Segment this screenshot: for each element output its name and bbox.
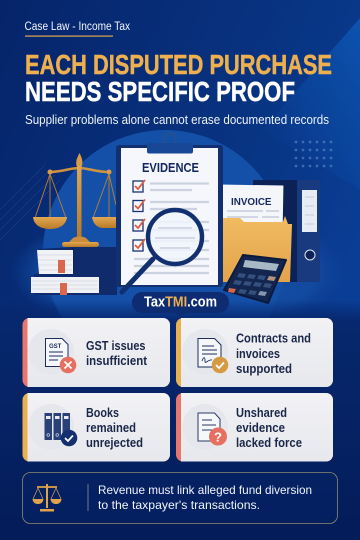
checklist [133, 180, 209, 273]
icon: document question: ? [214, 430, 222, 444]
illustration: evidence clipboard [116, 133, 223, 292]
card: unshared evidence: Unshared [236, 406, 287, 420]
card: GST issues [22, 318, 170, 387]
card: books unrejected: Books [86, 406, 119, 420]
decorative dot grid [295, 141, 332, 167]
icon: signed contract [198, 338, 228, 373]
callout: revenue must link [22, 472, 338, 524]
illustration: evidence clipboard: EVIDENCE [142, 160, 199, 175]
subtitle: Supplier problems alone cannot erase documented records [25, 112, 329, 127]
card: books unrejected: unrejected [86, 436, 143, 450]
illustration: scales of justice [33, 153, 116, 247]
card: unshared evidence: lacked force [236, 436, 302, 450]
card: contracts and invoices: invoices [236, 347, 280, 361]
card: GST issues: insufficient [86, 354, 148, 368]
illustration: invoice folder [219, 184, 292, 282]
illustration: invoice folder: INVOICE [231, 197, 272, 208]
card: unshared evidence [176, 393, 333, 462]
title [25, 49, 332, 107]
icon: GST document [46, 338, 76, 373]
icon: document question [198, 413, 227, 446]
magnifying glass [122, 210, 202, 292]
title: NEEDS SPECIFIC PROOF [25, 76, 295, 107]
callout: revenue must link: to the taxpayer's transactions. [98, 498, 260, 512]
card: contracts and invoices [176, 318, 333, 387]
icon: small scales [32, 484, 62, 512]
card: unshared evidence: evidence [236, 421, 285, 435]
category label: Case Law - Income Tax [24, 21, 130, 33]
icon: binders [44, 413, 77, 446]
illustration: binder [253, 180, 320, 282]
card: contracts and invoices: Contracts and [236, 332, 311, 346]
brand pill [132, 292, 229, 316]
illustration: stacked books [31, 247, 117, 295]
icon: GST document: GST [49, 344, 62, 350]
callout: revenue must link: Revenue must link alleged fund diversion [98, 483, 312, 497]
card: books unrejected [22, 393, 170, 462]
card: books unrejected: remained [86, 421, 136, 435]
card: contracts and invoices: supported [236, 362, 292, 376]
illustration: calculator [224, 255, 286, 303]
brand pill: TaxTMI.com [144, 294, 217, 310]
card: GST issues: GST issues [86, 339, 146, 353]
category label [24, 21, 130, 37]
